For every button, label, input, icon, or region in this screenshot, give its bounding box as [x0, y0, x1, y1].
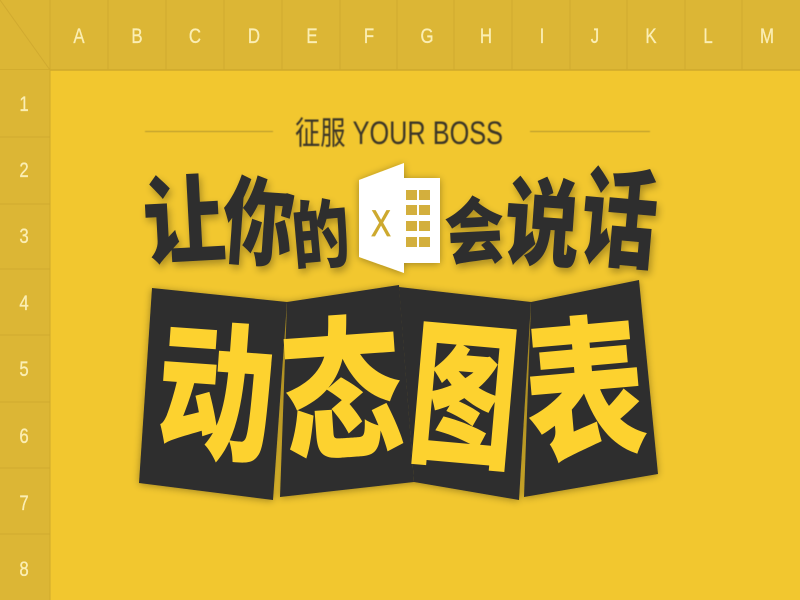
column header bar: I	[540, 25, 544, 49]
row header bar: 6	[19, 425, 29, 449]
title: 动态图表: 动	[151, 308, 280, 484]
headline: 会说话: 说	[501, 170, 584, 282]
panel: dark title blocks	[139, 280, 658, 500]
column header bar: B	[131, 25, 143, 49]
column header bar: J	[591, 25, 599, 49]
title: 动态图表	[151, 303, 653, 491]
column header bar: H	[480, 25, 492, 49]
column header bar: F	[364, 25, 374, 49]
column header bar	[0, 0, 800, 70]
column header bar: E	[306, 25, 318, 49]
headline: 会说话: 话	[576, 158, 662, 284]
column header bar: D	[248, 25, 260, 49]
headline: 会说话	[443, 158, 662, 284]
row header bar: 5	[19, 358, 29, 382]
column header bar: G	[420, 25, 434, 49]
row header bar: 4	[19, 292, 29, 316]
row header bar	[0, 70, 50, 600]
title: 动态图表: 态	[277, 306, 408, 482]
row header bar: 1	[19, 93, 29, 117]
row header bar: 7	[19, 492, 29, 516]
headline: 让你的: 你	[219, 169, 298, 280]
row header bar: 3	[19, 225, 29, 249]
column header bar: K	[645, 25, 657, 49]
row header bar: 2	[19, 159, 29, 183]
headline: 会说话: 会	[443, 192, 507, 276]
column header bar: L	[703, 25, 713, 49]
headline: 让你的: 的	[288, 193, 353, 281]
subtitle with rules: 征服 YOUR BOSS	[295, 115, 503, 151]
column header bar: A	[73, 25, 85, 49]
title: 动态图表: 表	[518, 303, 653, 485]
icon: Excel logo	[359, 163, 440, 273]
headline: 让你的	[140, 166, 353, 281]
icon: Excel logo: X	[371, 204, 391, 245]
column header bar: C	[189, 25, 201, 49]
title: 动态图表: 图	[403, 309, 525, 491]
headline: 让你的: 让	[140, 166, 228, 278]
column header bar: M	[760, 25, 774, 49]
row header bar: 8	[19, 558, 29, 582]
